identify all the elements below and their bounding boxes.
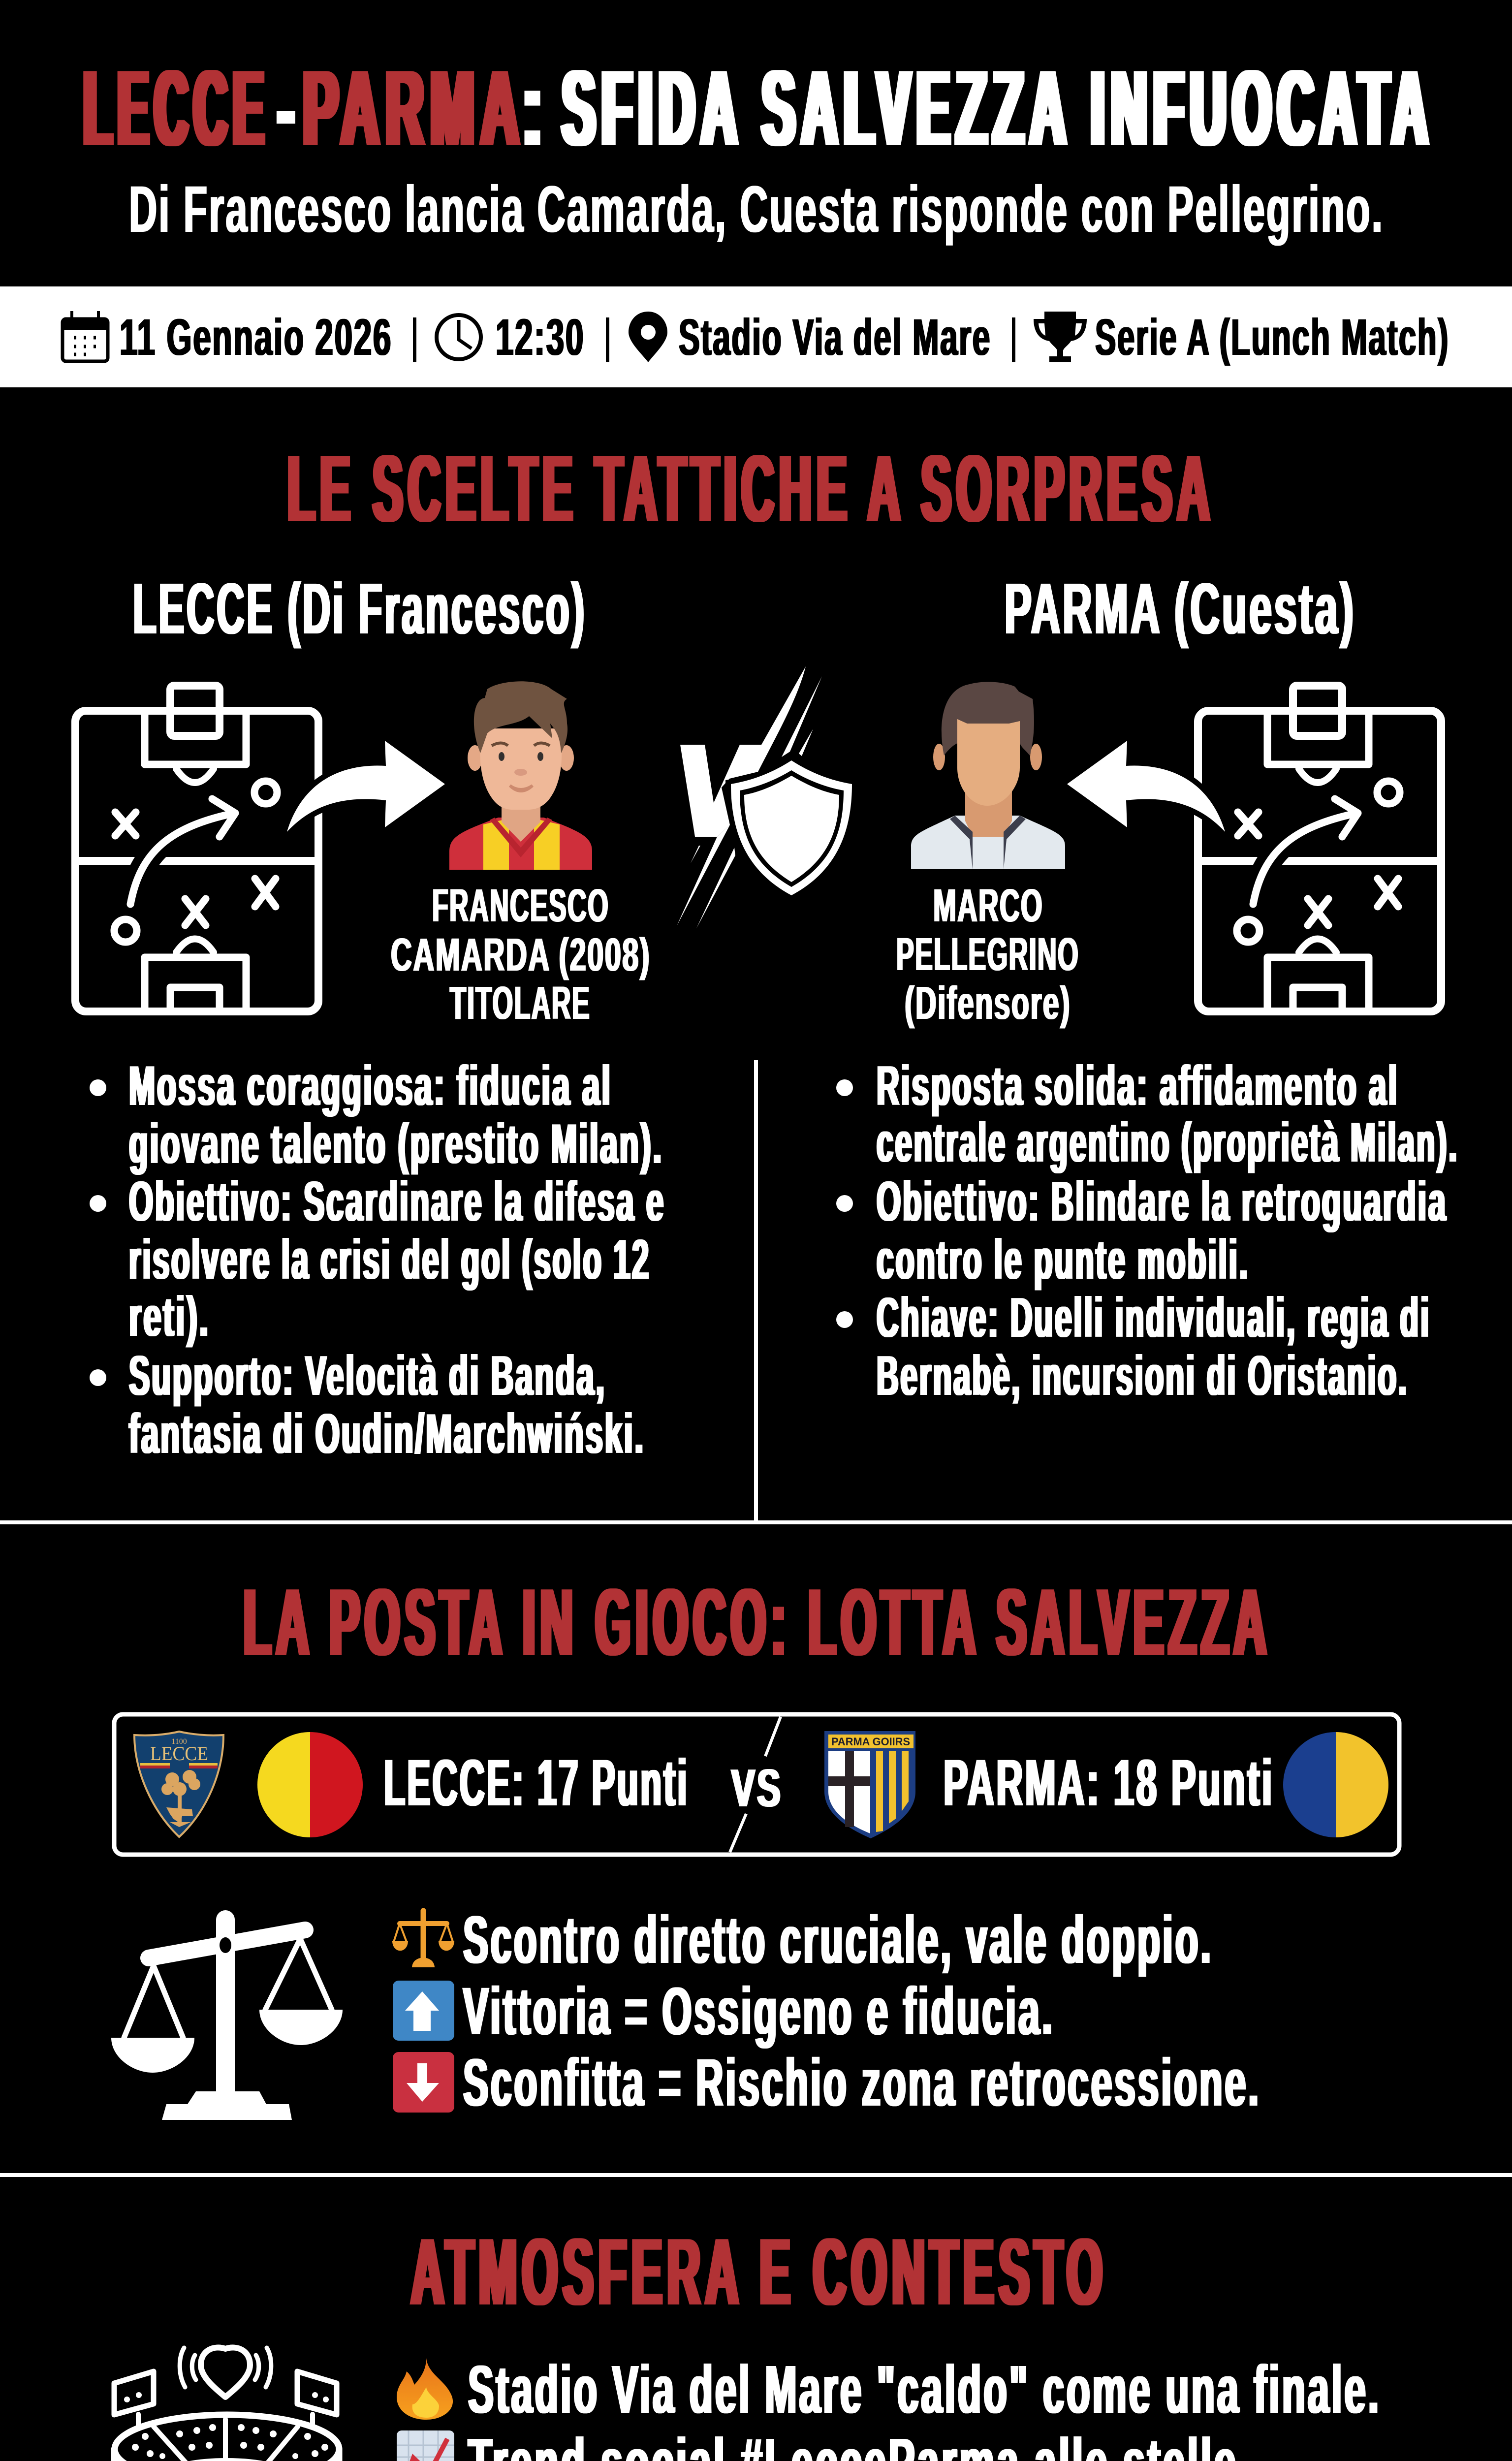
bullet list: lecce xyxy=(90,1055,665,1465)
icon: clock xyxy=(437,315,481,359)
icon: down arrow box xyxy=(393,2052,454,2113)
icon: parma crest xyxy=(824,1731,915,1838)
icon: tactics board parma xyxy=(1198,686,1441,1011)
icon: fire xyxy=(397,2358,453,2420)
title: PARMA xyxy=(303,48,526,168)
info bar xyxy=(0,286,1512,387)
title: - xyxy=(274,48,298,168)
player name: pellegrino: PELLEGRINO xyxy=(896,928,1079,980)
player name: camarda: FRANCESCO xyxy=(432,880,609,932)
player name: camarda: TITOLARE xyxy=(450,977,591,1029)
icon: tactics board lecce xyxy=(75,686,318,1011)
heading: lecce: LECCE (Di Francesco) xyxy=(133,568,587,649)
icon: scales emoji xyxy=(393,1911,454,1967)
icon: player pellegrino xyxy=(911,682,1065,869)
bullet list: lecce: risolvere la crisi del gol (solo 12 xyxy=(129,1229,651,1291)
player name: camarda xyxy=(391,880,651,1029)
arrow: parma to player xyxy=(1067,741,1225,832)
bullet list: lecce: giovane talento (prestito Milan). xyxy=(129,1113,663,1175)
list: stakes xyxy=(393,1902,1261,2120)
info bar: Stadio Via del Mare xyxy=(679,309,991,366)
score: lecce: LECCE: 17 Punti xyxy=(384,1746,689,1820)
info bar: 12:30 xyxy=(496,309,585,366)
icon: up arrow box xyxy=(393,1981,454,2041)
icon: scales xyxy=(111,1920,343,2120)
list: stakes: Vittoria = Ossigeno e fiducia. xyxy=(463,1974,1055,2049)
player name: pellegrino xyxy=(896,880,1079,1029)
bullet list: lecce: fantasia di Oudin/Marchwiński. xyxy=(129,1403,645,1465)
vs xyxy=(730,1717,783,1852)
icon: map pin xyxy=(629,312,667,362)
list: atmosphere xyxy=(397,2352,1381,2461)
icon: calendar xyxy=(63,311,108,361)
icon: vs shield xyxy=(677,666,857,928)
icon: stadium xyxy=(114,2347,339,2461)
title: : xyxy=(522,48,551,168)
info bar: 11 Gennaio 2026 xyxy=(120,309,392,366)
player name: camarda: CAMARDA (2008) xyxy=(391,929,651,981)
icon: trophy xyxy=(1034,312,1087,362)
player name: pellegrino: (Difensore) xyxy=(905,977,1071,1029)
panel: parma xyxy=(836,568,1459,1407)
icon: parma crest: PARMA GOIIRS xyxy=(831,1735,910,1748)
bullet list: lecce: Obiettivo: Scardinare la difesa e xyxy=(129,1170,665,1233)
player name: pellegrino: MARCO xyxy=(933,880,1043,932)
vs: VS xyxy=(731,1758,783,1818)
panel: scoreboard xyxy=(114,1714,1399,1855)
title xyxy=(84,48,1434,168)
bullet list: lecce: reti). xyxy=(129,1286,210,1348)
panel: lecce xyxy=(75,568,665,1465)
bullet list: parma xyxy=(836,1055,1459,1407)
arrow: lecce to player xyxy=(287,741,445,832)
icon: lecce colours xyxy=(257,1732,363,1837)
icon: player camarda xyxy=(449,681,592,870)
icon: lecce crest: 1100 xyxy=(171,1737,187,1746)
icon: parma colours xyxy=(1283,1732,1388,1837)
icon: lecce crest: LECCE xyxy=(150,1742,208,1765)
icon: trend chart xyxy=(397,2430,454,2461)
bullet list: lecce: Supporto: Velocità di Banda, xyxy=(129,1345,606,1407)
bullet list: lecce: Mossa coraggiosa: fiducia al xyxy=(129,1055,612,1117)
title: LECCE xyxy=(84,48,270,168)
icon: lecce crest xyxy=(134,1732,223,1837)
